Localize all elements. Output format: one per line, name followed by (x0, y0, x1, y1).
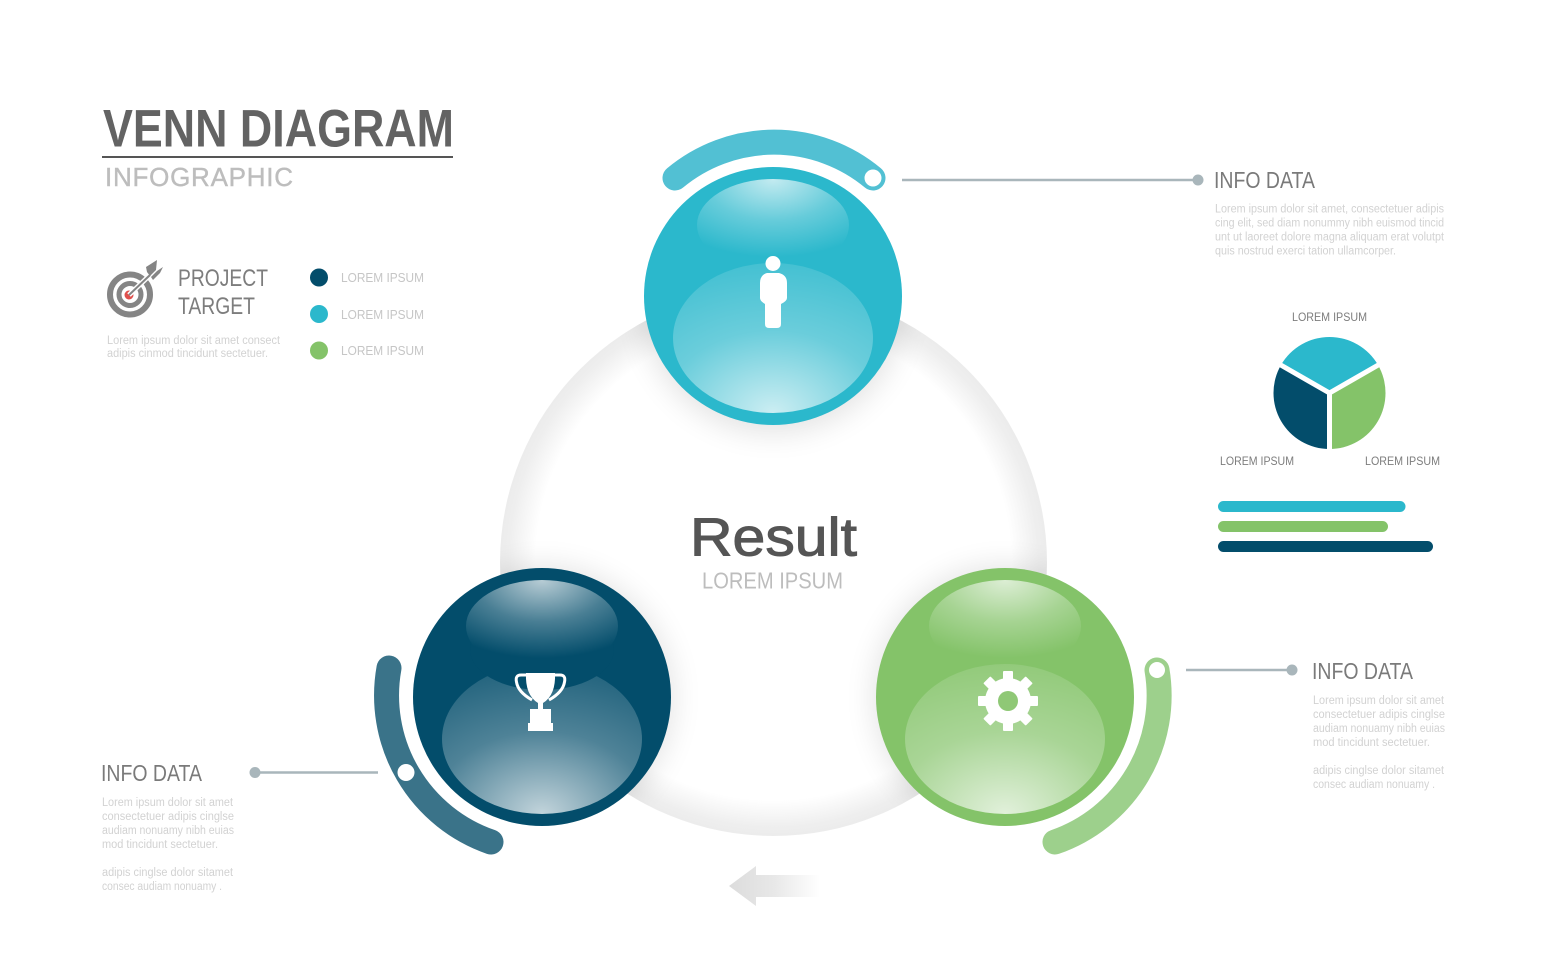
icon: gear (978, 671, 1038, 731)
info block: bottom left: consec audiam nonuamy . (102, 881, 222, 893)
info block: bottom left: adipis cinglse dolor sitamet (102, 867, 234, 879)
project target heading: TARGET (178, 293, 255, 320)
project target heading: PROJECT (178, 265, 268, 292)
info block: top right: cing elit, sed diam nonummy nibh euismod tincid (1215, 218, 1444, 230)
info block: bottom left: Lorem ipsum dolor sit amet (102, 797, 234, 809)
info block: top right: Lorem ipsum dolor sit amet, consectetuer adipis (1215, 204, 1444, 216)
info block: bottom left: audiam nonuamy nibh euias (102, 825, 234, 837)
legend: LOREM IPSUM (341, 344, 424, 358)
legend: LOREM IPSUM (341, 271, 424, 285)
info block: bottom left: consectetuer adipis cinglse (102, 811, 234, 823)
info block: bottom right: consec audiam nonuamy . (1313, 779, 1435, 791)
info block: top right (1214, 167, 1445, 258)
legend: LOREM IPSUM (341, 308, 424, 322)
pie chart (1220, 310, 1440, 468)
result label (690, 508, 857, 594)
leader line: right (1186, 664, 1298, 676)
icon: trophy (516, 673, 565, 731)
title: VENN DIAGRAM (103, 100, 454, 158)
leader line: left (250, 767, 378, 778)
leader line: top (902, 174, 1204, 186)
info block: bottom left: INFO DATA (101, 760, 203, 786)
info block: top right: quis nostrud exerci tation ullamcorper. (1215, 246, 1396, 258)
icon: person (760, 256, 787, 328)
info block: bottom right (1312, 658, 1445, 791)
info block: top right: unt ut laoreet dolore magna aliquam erat volutpt (1215, 232, 1445, 244)
info block: bottom right: INFO DATA (1312, 658, 1414, 684)
project target text: Lorem ipsum dolor sit amet consect (107, 335, 281, 347)
project target heading (178, 265, 268, 320)
info block: bottom right: consectetuer adipis cinglse (1313, 709, 1445, 721)
bar chart (1218, 501, 1433, 552)
result label: Result (690, 508, 857, 568)
pie chart: LOREM IPSUM (1220, 454, 1294, 468)
panel: navy sphere (387, 568, 671, 842)
title: INFOGRAPHIC (105, 162, 293, 192)
info block: bottom right: adipis cinglse dolor sitamet (1313, 765, 1445, 777)
pie chart: LOREM IPSUM (1365, 454, 1440, 468)
project target text (107, 335, 281, 360)
project target text: adipis cinmod tincidunt sectetuer. (107, 348, 268, 360)
info block: bottom right: Lorem ipsum dolor sit amet (1313, 695, 1445, 707)
panel: result circle (500, 320, 1047, 836)
result label: LOREM IPSUM (702, 568, 843, 594)
info block: bottom right: mod tincidunt sectetuer. (1313, 737, 1430, 749)
arrow (729, 866, 820, 906)
info block: bottom left: mod tincidunt sectetuer. (102, 839, 218, 851)
pie chart: LOREM IPSUM (1292, 310, 1367, 324)
icon: target (110, 260, 163, 314)
info block: top right: INFO DATA (1214, 167, 1316, 193)
panel: blue sphere (644, 142, 902, 425)
info block: bottom right: audiam nonuamy nibh euias (1313, 723, 1445, 735)
title (102, 100, 454, 192)
panel: green sphere (876, 568, 1165, 842)
legend (310, 268, 424, 360)
info block: bottom left (101, 760, 234, 893)
